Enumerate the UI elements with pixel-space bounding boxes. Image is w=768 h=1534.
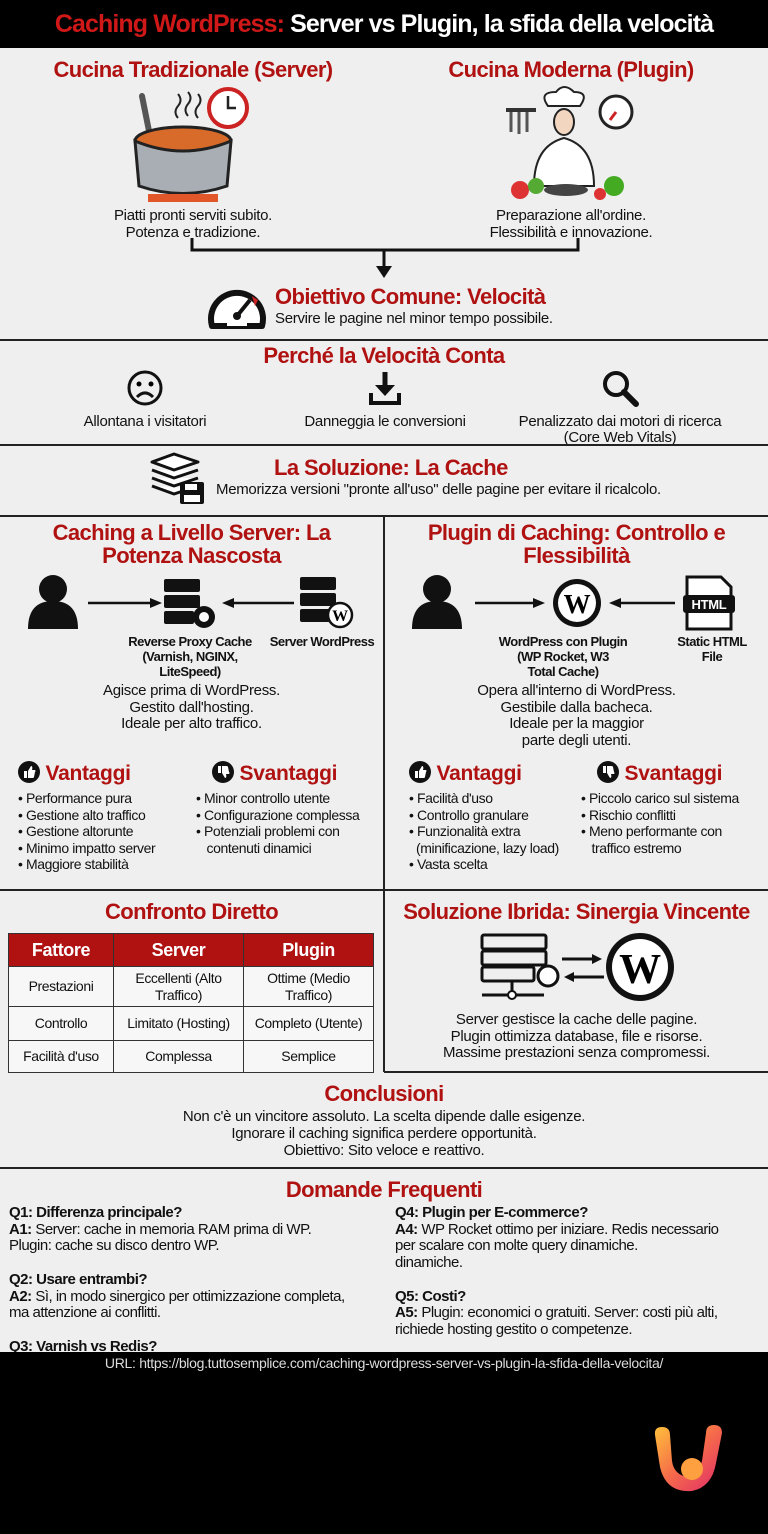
text: plugin description: Opera all'interno di WordPress.: [477, 682, 676, 699]
heading: why speed: Perché la Velocità Conta: [263, 343, 505, 368]
pros: server: Vantaggi: [46, 762, 131, 785]
diagram: plugin flow: HTML: [692, 597, 727, 612]
goal block: [208, 284, 553, 329]
item: search engines: Penalizzato dai motori di ricerca: [519, 413, 721, 430]
heading: server caching: [53, 520, 332, 568]
icon: stacked pages with disk: [150, 452, 204, 504]
heading: solution: La Soluzione: La Cache: [274, 455, 508, 480]
pros: server: • Minimo impatto server: [18, 840, 155, 856]
pros: plugin: • Controllo granulare: [409, 806, 528, 822]
cons: plugin: • Piccolo carico sul sistema: [581, 790, 739, 806]
cons: plugin: Svantaggi: [625, 762, 722, 785]
icon: pot: [133, 87, 249, 202]
heading: conclusions: Conclusioni: [324, 1081, 444, 1106]
label: static html: Static HTML: [677, 634, 747, 649]
cons: server: [196, 761, 360, 856]
faq column left: A2: Sì, in modo sinergico per ottimizzazione completa,: [9, 1288, 345, 1305]
label: wp with plugin: Total Cache): [527, 664, 599, 679]
cons: plugin: • Meno performante con: [581, 823, 722, 839]
cons: server: Svantaggi: [240, 762, 337, 785]
heading: plugin caching: Flessibilità: [523, 543, 630, 568]
text: plugin description: parte degli utenti.: [522, 732, 631, 748]
text: traditional: [114, 207, 272, 240]
faq column right: Q5: Costi?: [395, 1288, 466, 1305]
faq column left: ma attenzione ai conflitti.: [9, 1304, 161, 1321]
icon: chef: [506, 86, 634, 200]
heading: server caching: Potenza Nascosta: [102, 543, 281, 568]
icon: download: [369, 372, 401, 405]
faq column left: A1: Server: cache in memoria RAM prima di WP.: [9, 1221, 311, 1238]
text: hybrid: Plugin ottimizza database, file e risorse.: [451, 1028, 702, 1044]
label: static html: File: [702, 649, 722, 664]
table: comparison: Ottime (Medio: [267, 970, 350, 986]
faq column left: Q2: Usare entrambi?: [9, 1271, 147, 1288]
faq column right: A5: Plugin: economici o gratuiti. Server: costi più alti,: [395, 1304, 718, 1321]
text: modern: Flessibilità e innovazione.: [490, 224, 652, 240]
pros: plugin: • Funzionalità extra: [409, 823, 520, 839]
text: conclusions: Obiettivo: Sito veloce e reattivo.: [284, 1142, 484, 1159]
heading: goal: Obiettivo Comune: Velocità: [275, 284, 545, 309]
pros: server: • Performance pura: [18, 790, 132, 806]
table: comparison: Facilità d'uso: [23, 1048, 99, 1064]
footer url: URL: https://blog.tuttosemplice.com/caching-wordpress-server-vs-plugin-la-sfida-della-velocita/: [105, 1355, 663, 1371]
pros: plugin: [409, 761, 559, 872]
heading: faq: Domande Frequenti: [286, 1177, 482, 1202]
table: comparison: Plugin: [282, 940, 335, 960]
faq column right: dinamiche.: [395, 1254, 463, 1271]
table: comparison: Completo (Utente): [255, 1015, 362, 1031]
panel: why speed matters: [84, 343, 722, 446]
label: wp with plugin: (WP Rocket, W3: [517, 649, 609, 664]
text: plugin description: Ideale per la maggior: [509, 715, 644, 732]
text: server description: Agisce prima di WordPress.: [103, 682, 280, 699]
item: visitors: Allontana i visitatori: [84, 413, 206, 430]
panel: conclusions: [183, 1081, 585, 1159]
cons: server: contenuti dinamici: [206, 840, 311, 856]
icon: magnifier: [603, 371, 639, 407]
label: reverse proxy: Reverse Proxy Cache: [128, 634, 252, 649]
text: modern: Preparazione all'ordine.: [496, 207, 646, 224]
heading: hybrid: Soluzione Ibrida: Sinergia Vincente: [403, 899, 750, 924]
text: server description: Ideale per alto traffico.: [121, 715, 262, 732]
table: comparison: Limitato (Hosting): [127, 1015, 230, 1031]
pros: plugin: (minificazione, lazy load): [416, 840, 559, 856]
diagram: server flow: [28, 575, 354, 629]
text: conclusions: [183, 1108, 585, 1159]
table: comparison: Controllo: [35, 1015, 87, 1031]
faq column left: Plugin: cache su disco dentro WP.: [9, 1237, 219, 1254]
table: comparison: Complessa: [145, 1048, 212, 1064]
cons: server: • Minor controllo utente: [196, 790, 330, 806]
item: search engines: (Core Web Vitals): [564, 429, 676, 446]
icon: server to wordpress: W: [619, 947, 661, 993]
title: Caching WordPress: Server vs Plugin, la sfida della velocità: [55, 10, 713, 38]
diagram: plugin flow: W: [564, 589, 591, 619]
item: conversions: [304, 372, 466, 430]
pros: server: [18, 761, 156, 872]
heading: plugin caching: [428, 520, 725, 568]
text: hybrid: Server gestisce la cache delle pagine.: [456, 1011, 697, 1028]
text: plugin description: Gestibile dalla bacheca.: [500, 698, 653, 716]
heading: plugin caching: Plugin di Caching: Controllo e: [428, 520, 725, 545]
table: comparison: [8, 933, 374, 1073]
faq column left: [9, 1205, 384, 1355]
icon: server to wordpress: [480, 933, 674, 1001]
heading: traditional: Cucina Tradizionale (Server): [53, 57, 333, 82]
table: comparison: Prestazioni: [29, 978, 93, 994]
text: plugin description: [477, 682, 676, 748]
heading: modern: Cucina Moderna (Plugin): [448, 57, 694, 82]
pros: server: • Gestione alto traffico: [18, 806, 145, 822]
table: comparison: Semplice: [281, 1048, 336, 1064]
cons: plugin: • Rischio conflitti: [581, 806, 676, 822]
cons: server: • Configurazione complessa: [196, 806, 359, 822]
text: hybrid: [443, 1011, 710, 1061]
pros: plugin: Vantaggi: [437, 762, 522, 785]
label: wp with plugin: [498, 634, 627, 679]
cons: server: • Potenziali problemi con: [196, 823, 340, 839]
label: wp with plugin: WordPress con Plugin: [499, 634, 627, 649]
pros: server: • Maggiore stabilità: [18, 856, 129, 872]
icon: sad face: [128, 370, 162, 406]
faq column right: richiede hosting gestito o competenze.: [395, 1321, 632, 1338]
text: solution: Memorizza versioni "pronte all'uso" delle pagine per evitare il ricalcolo.: [216, 481, 661, 498]
panel: server-level caching: [18, 520, 374, 872]
faq column right: Q4: Plugin per E-commerce?: [395, 1204, 588, 1221]
text: goal: Servire le pagine nel minor tempo possibile.: [275, 310, 553, 327]
label: server wordpress: Server WordPress: [270, 634, 374, 649]
table: comparison: Fattore: [32, 940, 90, 960]
logo: [652, 1423, 724, 1495]
label: reverse proxy: LiteSpeed): [159, 664, 221, 679]
panel: faq: [9, 1177, 719, 1352]
pros: plugin: • Facilità d'uso: [409, 790, 493, 806]
pros: server: • Gestione altorunte: [18, 823, 133, 839]
heading: server caching: Caching a Livello Server: La: [53, 520, 330, 545]
faq column right: per scalare con molte query dinamiche.: [395, 1237, 638, 1254]
item: search engines: [519, 371, 722, 446]
panel: plugin caching: [409, 520, 747, 872]
diagram: plugin flow: [412, 575, 735, 630]
text: traditional: Piatti pronti serviti subito.: [114, 207, 272, 224]
icon: speedometer: [208, 290, 266, 329]
table: comparison: Traffico): [285, 986, 332, 1002]
text: hybrid: Massime prestazioni senza compromessi.: [443, 1044, 710, 1061]
label: reverse proxy: [128, 634, 252, 679]
pros: plugin: • Vasta scelta: [409, 856, 487, 872]
table: comparison: Traffico): [155, 986, 202, 1002]
table: comparison: Server: [152, 940, 205, 960]
item: visitors: [84, 370, 206, 430]
text: server description: Gestito dall'hosting.: [129, 698, 254, 716]
item: conversions: Danneggia le conversioni: [304, 413, 466, 430]
diagram: server flow: W: [332, 608, 348, 625]
panel: hybrid solution: [403, 899, 750, 1061]
label: reverse proxy: (Varnish, NGINX,: [142, 649, 238, 664]
title: [0, 0, 768, 48]
panel: modern kitchen: [448, 57, 694, 240]
table: comparison: Eccellenti (Alto: [135, 970, 222, 986]
panel: direct comparison: [8, 899, 374, 1073]
text: traditional: Potenza e tradizione.: [126, 224, 260, 240]
text: server description: [103, 682, 280, 732]
faq column right: [395, 1205, 768, 1339]
cons: plugin: traffico estremo: [591, 840, 681, 856]
label: static html: [677, 634, 747, 664]
heading: comparison: Confronto Diretto: [105, 899, 278, 924]
text: modern: [490, 207, 652, 240]
arrow: merge bracket: [190, 238, 580, 278]
faq column left: Q1: Differenza principale?: [9, 1204, 182, 1221]
panel: the solution cache: [150, 452, 661, 504]
cons: plugin: [581, 761, 740, 856]
text: conclusions: Non c'è un vincitore assoluto. La scelta dipende dalle esigenze.: [183, 1108, 585, 1125]
text: conclusions: Ignorare il caching significa perdere opportunità.: [231, 1125, 537, 1142]
faq column right: A4: WP Rocket ottimo per iniziare. Redis necessario: [395, 1221, 719, 1238]
panel: traditional kitchen: [53, 57, 333, 240]
